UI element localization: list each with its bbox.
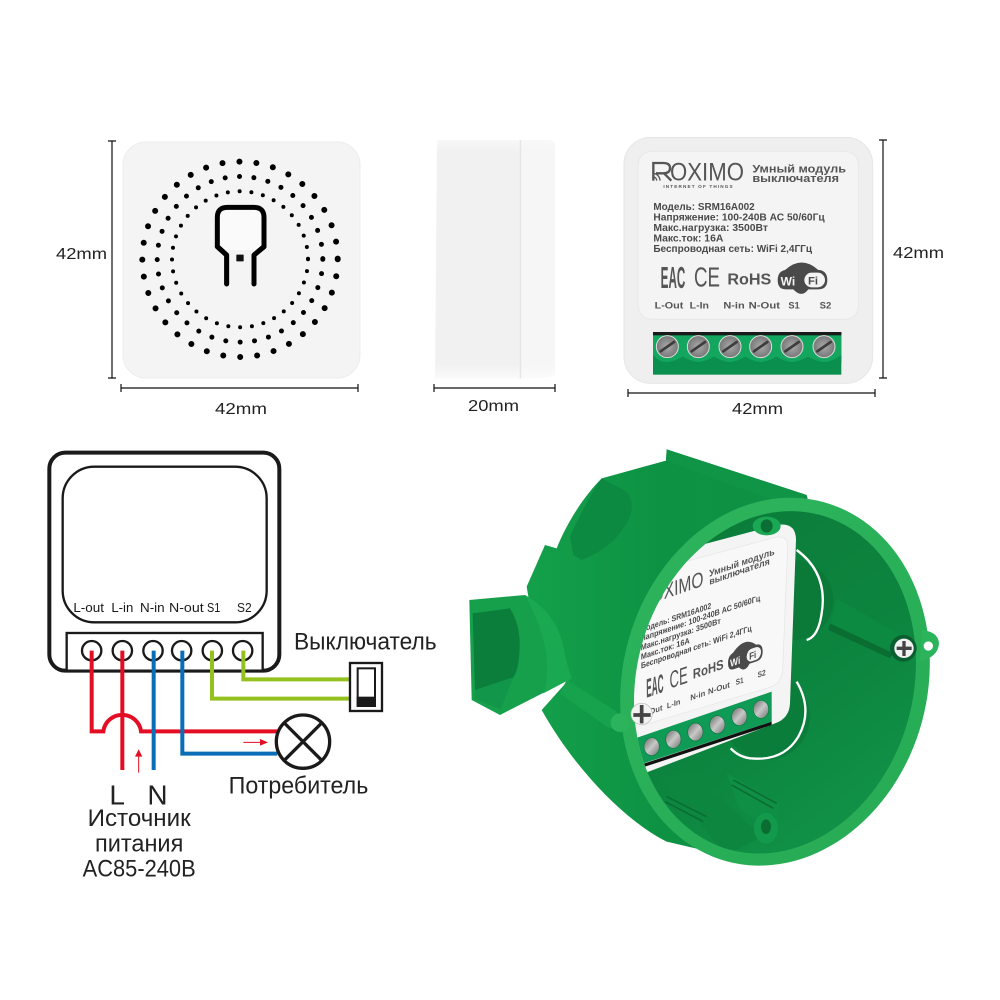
module printed label: Макс.нагрузка: 3500Вт (641, 616, 721, 653)
module printed label: CE (669, 661, 688, 694)
terminal labels: L-out (73, 600, 104, 615)
icon: WiFi badge (778, 262, 827, 294)
module printed label: L-Out (642, 702, 663, 719)
logo: ROXIMO (653, 160, 744, 189)
device front body (123, 142, 360, 378)
ribbed texture (665, 780, 777, 822)
certification marks: CE (694, 262, 720, 293)
specifications text (653, 202, 825, 255)
terminal labels: S1 (207, 600, 220, 615)
module printed label: Беспроводная сеть: WiFi 2,4ГГц (641, 623, 752, 671)
product title (752, 164, 846, 185)
terminal labels: L-In (690, 301, 709, 311)
arrow: current upward (135, 749, 142, 773)
back body (624, 137, 873, 383)
bottom mounting post (754, 813, 778, 844)
terminal labels (73, 600, 252, 615)
certification marks: EAC (661, 261, 685, 295)
module printed label: RoHS (693, 656, 724, 682)
terminal labels: N-in (723, 301, 745, 311)
icon: WiFi badge: Fi (808, 276, 818, 288)
product title: выключателя (752, 173, 839, 185)
module white body (634, 524, 796, 772)
label: consumer: Потребитель (229, 772, 368, 799)
panel: module mounted in green junction box (469, 449, 939, 866)
label: power source: AC85-240B (83, 856, 196, 883)
module label panel (63, 467, 267, 622)
module printed label: Макс.ток: 16А (641, 635, 690, 662)
panel: wiring diagram (49, 453, 437, 883)
module terminal block (635, 692, 772, 768)
upper knockout (792, 549, 833, 642)
dimension: back width (628, 389, 875, 418)
module printed label: OXIMO (652, 567, 704, 609)
box ridge below tube (560, 680, 627, 733)
module printed label: L-In (667, 696, 681, 711)
box top flap and knockout (570, 449, 807, 560)
arrow: current to load (243, 739, 268, 746)
specifications text: Макс.нагрузка: 3500Вт (653, 223, 768, 234)
label: N: N (147, 779, 168, 810)
dimension: back height (879, 140, 944, 378)
panel: front view of the module (123, 142, 360, 378)
side body (435, 140, 555, 378)
lower knockout (730, 681, 810, 760)
terminal labels: N-out (169, 600, 204, 615)
speaker dot rings (142, 162, 338, 357)
terminal labels: L-Out (655, 301, 683, 311)
logo: ROXIMO: INTERNET OF THINGS (663, 184, 733, 189)
dimension: side depth (434, 384, 555, 415)
interior details (634, 524, 892, 851)
label panel (638, 151, 859, 319)
dimension: back height: 42mm (893, 245, 944, 262)
terminal labels: N-Out (749, 301, 780, 311)
terminal labels: L-in (111, 600, 133, 615)
panel: side view of the module (435, 140, 555, 378)
module printed label: выключателя (709, 556, 770, 587)
box cylinder body (527, 449, 827, 863)
terminal labels: S2 (237, 600, 252, 615)
dimension: side depth: 20mm (468, 398, 519, 415)
dimension: front width: 42mm (215, 401, 267, 418)
logo: ROXIMO: OXIMO (670, 160, 744, 187)
terminal block (653, 332, 841, 375)
green switch wires (212, 651, 350, 699)
module printed label: S1 (736, 675, 744, 687)
right mounting screw (890, 635, 917, 662)
red live wires (92, 651, 277, 770)
icon: button and plug (217, 207, 264, 290)
certification marks: RoHS (727, 272, 772, 289)
panel: back view of the module (624, 137, 873, 383)
specifications text: Беспроводная сеть: WiFi 2,4ГГц (653, 244, 812, 255)
specifications text: Напряжение: 100-240В АС 50/60Гц (653, 212, 825, 223)
terminal labels: S2 (820, 301, 831, 311)
terminal box (67, 633, 263, 671)
box interior (597, 479, 953, 886)
box rim (580, 463, 970, 901)
lower screw post (727, 773, 780, 830)
left mounting screw (611, 703, 652, 732)
module printed label: S2 (758, 667, 766, 680)
module printed label: EAC (646, 669, 664, 704)
label: power source (83, 805, 196, 883)
module printed label: Wi (730, 655, 740, 670)
label: L: L (109, 779, 125, 810)
module printed label: Напряжение: 100-240В АС 50/60Гц (641, 593, 760, 643)
terminal labels (655, 301, 831, 311)
certification marks (661, 261, 772, 295)
dimension: back width: 42mm (732, 401, 783, 418)
top mounting post (753, 517, 781, 535)
dimension: front height (56, 141, 116, 378)
terminal circles (82, 641, 252, 660)
specifications text: Модель: SRM16A002 (653, 202, 755, 213)
module printed label: Модель: SRM16A002 (640, 601, 711, 635)
module printed label: N-Out (708, 679, 730, 697)
mounting lug (920, 630, 939, 662)
dimension: front width (121, 384, 358, 418)
label: switch: Выключатель (294, 628, 437, 655)
module outline (49, 453, 279, 671)
infographic canvas (47, 137, 943, 876)
module printed label (640, 543, 777, 719)
icon: WiFi badge: Wi (781, 274, 795, 288)
side conduit tube (469, 595, 572, 715)
module printed label: Умный модуль (709, 546, 775, 579)
module printed label: N-in (690, 688, 706, 703)
module printed label: Fi (749, 649, 756, 662)
upper screw post (830, 598, 903, 653)
blue neutral wires (154, 651, 277, 770)
product title: Умный модуль (752, 164, 846, 176)
label: power source: питания (95, 831, 183, 858)
specifications text: Макс.ток: 16А (653, 234, 723, 245)
dimension: front height: 42mm (56, 246, 107, 263)
icon: wall switch (350, 663, 382, 711)
terminal labels: N-in (140, 600, 165, 615)
terminal labels: S1 (788, 301, 800, 311)
icon: lamp (276, 715, 330, 768)
label: power source: Источник (88, 805, 191, 832)
